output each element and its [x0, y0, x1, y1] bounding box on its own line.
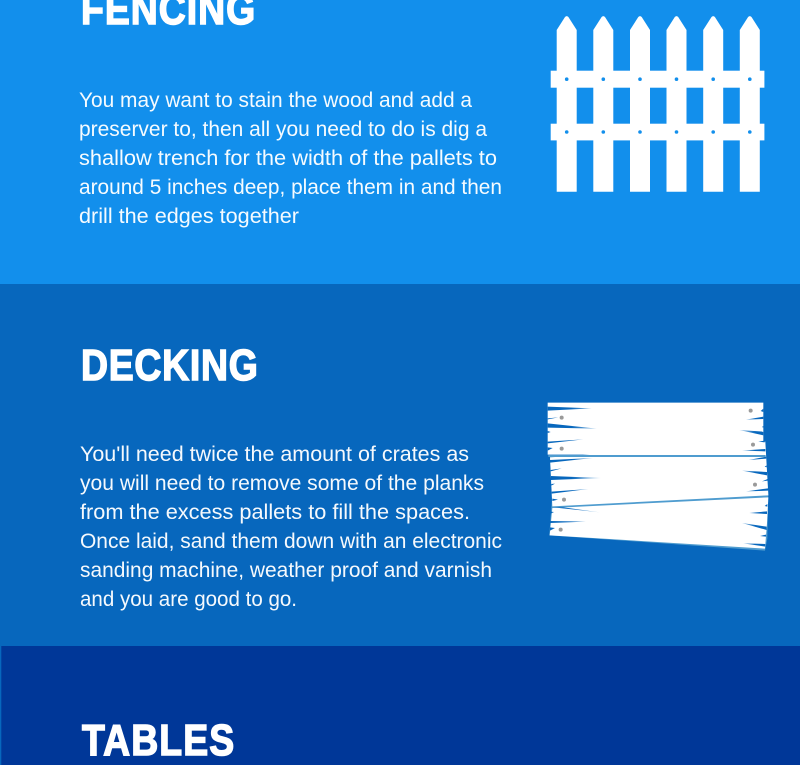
text block: fencing instructions	[79, 89, 502, 228]
text block: decking instructions: from the excess pallets to fill the spaces.	[80, 501, 470, 524]
heading: decking: DECKING	[81, 340, 258, 390]
text block: fencing instructions: drill the edges together	[79, 205, 299, 228]
text block: decking instructions: Once laid, sand them down with an electronic	[80, 530, 502, 553]
text block: decking instructions: You'll need twice the amount of crates as	[80, 443, 469, 466]
text block: decking instructions: you will need to remove some of the planks	[80, 472, 484, 495]
icon: wooden planks	[548, 403, 768, 551]
icon: picket fence	[551, 16, 764, 192]
text block: decking instructions: and you are good to go.	[80, 588, 297, 611]
panel: tables	[0, 646, 800, 765]
text block: fencing instructions: You may want to stain the wood and add a	[79, 89, 472, 112]
text block: fencing instructions: preserver to, then all you need to do is dig a	[79, 118, 487, 141]
panel: fencing	[0, 0, 800, 284]
heading: tables: TABLES	[82, 715, 234, 765]
text block: fencing instructions: shallow trench for the width of the pallets to	[79, 147, 497, 170]
text block: decking instructions: sanding machine, weather proof and varnish	[80, 559, 492, 582]
panel: decking	[0, 284, 800, 646]
text block: fencing instructions: around 5 inches deep, place them in and then	[79, 176, 502, 199]
text block: decking instructions	[80, 443, 502, 611]
